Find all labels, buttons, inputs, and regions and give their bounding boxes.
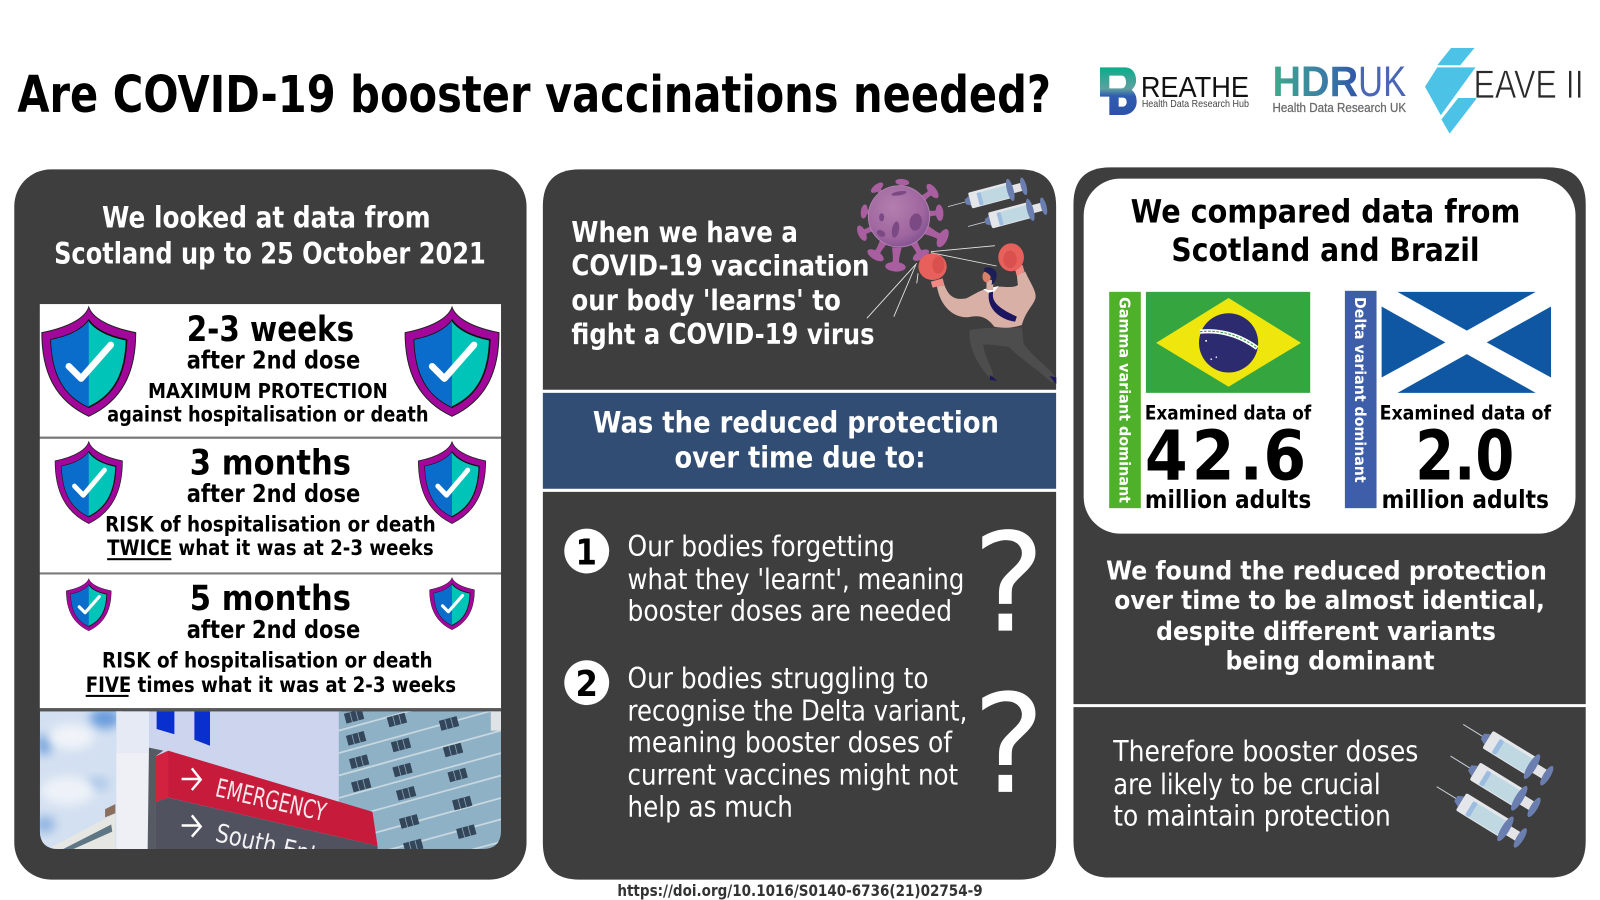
card text: 2-3 weeks: after 2nd dose [187, 345, 360, 374]
stat: Brazil: Examined data of [1145, 401, 1312, 424]
text: body learns [571, 216, 874, 351]
logo: BREATHE: REATHE [1141, 72, 1249, 104]
logo: HDR UK: Health Data Research UK [1272, 100, 1407, 115]
stat: Brazil: 42.6 [1145, 418, 1306, 496]
finding text [1106, 557, 1547, 676]
icon: boxer punching virus [867, 243, 1056, 384]
flag: Scotland [1382, 292, 1551, 393]
card: 5 months [40, 574, 501, 708]
conclusion text [1112, 735, 1418, 833]
card: 2-3 weeks [40, 304, 501, 437]
text: body learns: COVID-19 vaccination [571, 250, 869, 283]
heading: data from Scotland [54, 201, 486, 270]
option 1: forgetting: Our bodies forgetting [628, 530, 895, 563]
label: gamma variant: Gamma variant dominant [1115, 297, 1133, 503]
icon: large shield left [42, 307, 136, 416]
finding text: We found the reduced protection [1106, 557, 1547, 587]
card text: 5 months: RISK of hospitalisation or death [102, 648, 433, 673]
heading: data from Scotland: Scotland up to 25 October 2021 [54, 236, 486, 270]
heading: compared data [1131, 192, 1520, 269]
card text: 5 months: FIVE times what it was at 2-3 weeks [86, 673, 456, 698]
card text: 2-3 weeks: 2-3 weeks [187, 310, 354, 350]
photo: hospital emergency sign: South Entr [213, 818, 329, 873]
icon: medium shield left [55, 442, 122, 524]
banner: question: over time due to: [674, 440, 926, 474]
photo: hospital emergency sign [40, 711, 501, 849]
card text: 2-3 weeks [107, 310, 429, 427]
option 1: forgetting: what they 'learnt', meaning [628, 563, 964, 596]
icon: syringes pair [945, 175, 1049, 238]
option 2: Delta variant: 2 [576, 664, 598, 705]
label: delta variant [1345, 291, 1377, 508]
logo: HDR UK: UK [1358, 58, 1406, 106]
icon: virus [855, 178, 951, 272]
card text: 3 months: RISK of hospitalisation or death [105, 513, 436, 538]
card text: 3 months: TWICE what it was at 2-3 weeks [107, 536, 434, 561]
option 1: forgetting: ? [972, 505, 1045, 664]
title: Are COVID-19 booster vaccinations needed? [17, 66, 1051, 125]
card text: 5 months: after 2nd dose [187, 615, 360, 644]
finding text: despite different variants [1156, 617, 1496, 647]
banner: question: Was the reduced protection [593, 406, 999, 440]
flag: Brazil [1146, 292, 1310, 393]
conclusion text: to maintain protection [1113, 800, 1391, 833]
option 2: Delta variant: help as much [628, 790, 793, 823]
finding text: over time to be almost identical, [1114, 586, 1545, 616]
option 1: forgetting [564, 505, 1045, 664]
option 2: Delta variant: current vaccines might not [628, 759, 958, 792]
icon: large shield right [405, 307, 499, 416]
card text: 2-3 weeks: MAXIMUM PROTECTION [148, 379, 388, 403]
stat: Brazil [1145, 401, 1312, 514]
card text: 2-3 weeks: against hospitalisation or death [107, 402, 429, 427]
option 2: Delta variant: meaning booster doses of [628, 726, 953, 759]
label: gamma variant [1109, 292, 1141, 508]
banner: question [543, 393, 1056, 489]
conclusion text: are likely to be crucial [1113, 768, 1381, 801]
text: body learns: our body 'learns' to [571, 284, 841, 317]
stat: Scotland: 2.0 [1415, 418, 1514, 497]
heading: compared data: We compared data from [1131, 192, 1520, 230]
stat: Scotland: Examined data of [1380, 401, 1552, 424]
panel: vaccination and reduced protection [543, 169, 1056, 880]
card text: 3 months [105, 443, 436, 561]
card text: 5 months [86, 579, 456, 698]
conclusion text: Therefore booster doses [1112, 735, 1418, 768]
icon: three syringes [1429, 712, 1557, 852]
icon: small shield left [66, 579, 111, 631]
card text: 3 months: 3 months [190, 443, 351, 483]
logo: BREATHE [1100, 67, 1249, 115]
option 2: Delta variant: Our bodies struggling to [628, 662, 929, 695]
panel: Scotland and Brazil comparison [1073, 167, 1586, 878]
card: 3 months [40, 439, 501, 572]
text: body learns: fight a COVID-19 virus [571, 318, 874, 351]
option 2: Delta variant [564, 660, 1045, 825]
heading: compared data: Scotland and Brazil [1171, 231, 1480, 269]
photo: hospital emergency sign: EMERGENCY [213, 774, 329, 828]
option 1: forgetting: 1 [576, 532, 597, 573]
card text: 3 months: after 2nd dose [187, 479, 360, 508]
stat: Scotland: million adults [1382, 485, 1549, 514]
option 2: Delta variant: recognise the Delta variant, [628, 694, 967, 727]
label: delta variant: Delta variant dominant [1351, 297, 1369, 483]
option 2: Delta variant: ? [972, 666, 1045, 825]
icon: medium shield right [418, 442, 486, 524]
text: body learns: When we have a [571, 216, 798, 249]
logo: BREATHE: Health Data Research Hub [1142, 99, 1249, 110]
logo: HDR UK [1272, 58, 1407, 115]
card: comparison [1084, 179, 1576, 534]
option 1: forgetting: booster doses are needed [628, 594, 952, 627]
citation: https://doi.org/10.1016/S0140-6736(21)02754-9 [617, 881, 983, 900]
stat: Brazil: million adults [1145, 485, 1311, 514]
finding text: being dominant [1226, 646, 1435, 676]
card text: 5 months: 5 months [190, 579, 351, 619]
panel: data from Scotland [14, 169, 527, 880]
stat: Scotland [1380, 401, 1552, 514]
heading: data from Scotland: We looked at data from [102, 201, 431, 235]
logo: EAVE II [1425, 48, 1584, 134]
logo: HDR UK: HDR [1272, 58, 1358, 106]
icon: small shield right [430, 578, 474, 630]
